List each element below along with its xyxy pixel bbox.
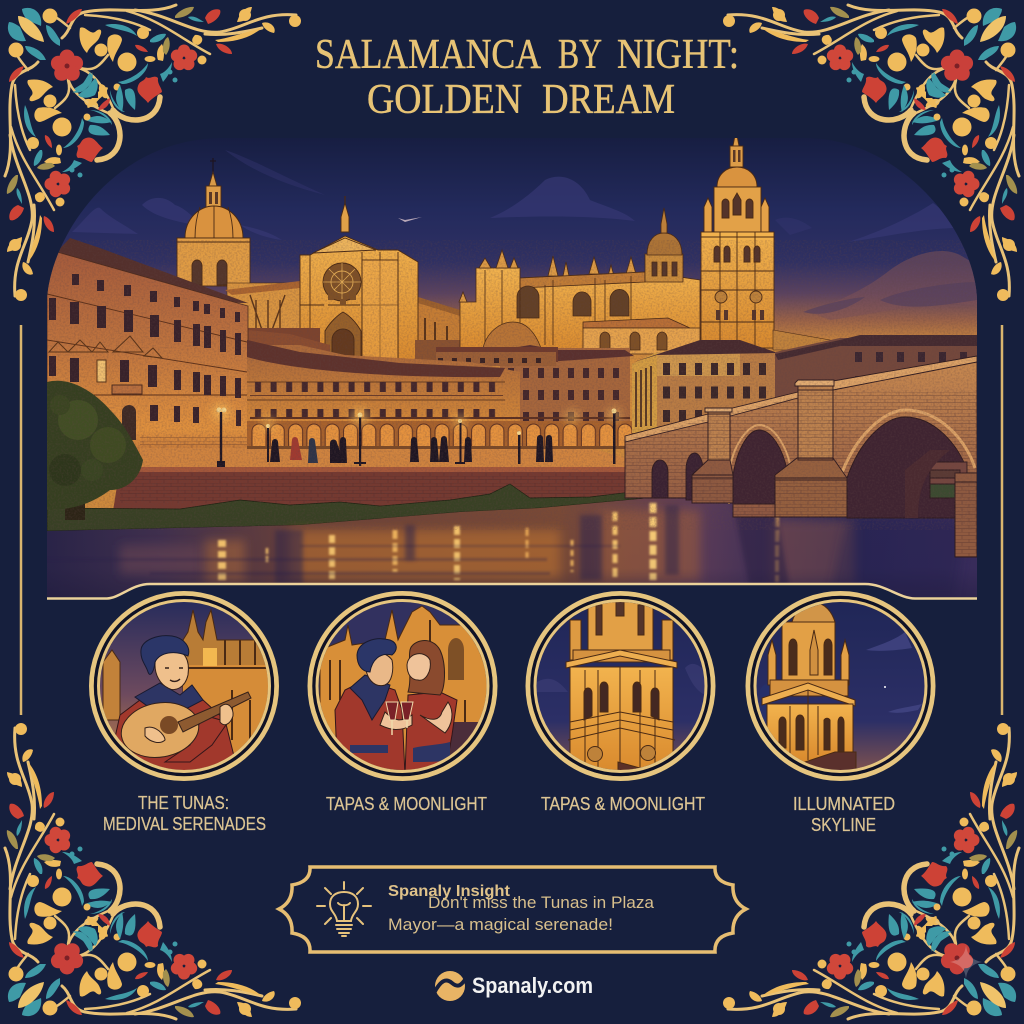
title: GOLDEN	[367, 77, 522, 123]
title: SALAMANCA	[315, 32, 542, 78]
stone bridge	[625, 356, 977, 557]
label	[103, 793, 266, 834]
ornament: bottom left corner	[5, 723, 301, 1019]
dark roofs beside the facade	[248, 328, 320, 342]
bird	[398, 217, 422, 222]
medallion: illuminated skyline	[748, 594, 933, 835]
small dome	[483, 322, 541, 348]
title: NIGHT:	[617, 32, 739, 78]
logo: Spanaly.com	[434, 971, 593, 1001]
ornament: top left corner	[5, 5, 301, 301]
dark right row	[775, 335, 977, 398]
ink grit texture	[47, 240, 977, 530]
label: TAPAS & MOONLIGHT	[326, 794, 487, 814]
label	[793, 794, 895, 835]
callout: Spanaly Insight: Don't miss the Tunas in Plaza	[428, 893, 655, 912]
logo: Spanaly.com: Spanaly.com	[472, 973, 593, 998]
river water	[47, 498, 977, 600]
title: DREAM	[542, 77, 675, 123]
tree	[47, 381, 143, 520]
ornament: bottom right corner	[723, 723, 1019, 1019]
palace	[47, 238, 248, 463]
warm reflection patches	[120, 510, 855, 586]
clouds	[72, 150, 960, 242]
panel: night skyline scene	[47, 125, 977, 600]
watermark sparkle	[950, 945, 982, 979]
icon: lightbulb	[317, 882, 371, 936]
dark reflection gaps	[275, 505, 679, 585]
medallion: tapas and moonlight couple	[310, 594, 500, 814]
dome left	[177, 158, 250, 286]
callout: Spanaly Insight	[279, 867, 746, 952]
plaza and wall	[140, 448, 248, 463]
street lights glow	[213, 404, 620, 430]
lampposts and people	[217, 412, 616, 467]
callout: Spanaly Insight: Spanaly Insight	[388, 883, 510, 900]
side border lines	[21, 325, 1002, 715]
label: MEDIVAL SERENADES	[103, 814, 266, 834]
side wing	[226, 282, 300, 328]
label: ILLUMNATED	[793, 794, 895, 814]
riverbank grass	[47, 484, 648, 531]
label: TAPAS & MOONLIGHT	[541, 794, 705, 814]
bright light streaks	[222, 503, 777, 582]
row buildings	[500, 348, 630, 421]
callout: Spanaly Insight: Mayor—a magical serenade!	[388, 915, 613, 934]
ornament: top right corner	[723, 5, 1019, 301]
panel frame: lower gold rule	[30, 584, 985, 620]
cathedral facade	[300, 196, 418, 362]
label: SKYLINE	[811, 815, 876, 835]
arc building	[247, 345, 520, 421]
right mid building	[632, 340, 778, 434]
medallion: the tunas	[92, 594, 276, 834]
title	[315, 32, 739, 123]
central gothic cathedral	[459, 208, 700, 354]
medallion: tower close-up	[528, 594, 713, 814]
title: BY	[558, 32, 602, 78]
main bell tower	[701, 125, 774, 348]
label: THE TUNAS:	[138, 793, 229, 813]
